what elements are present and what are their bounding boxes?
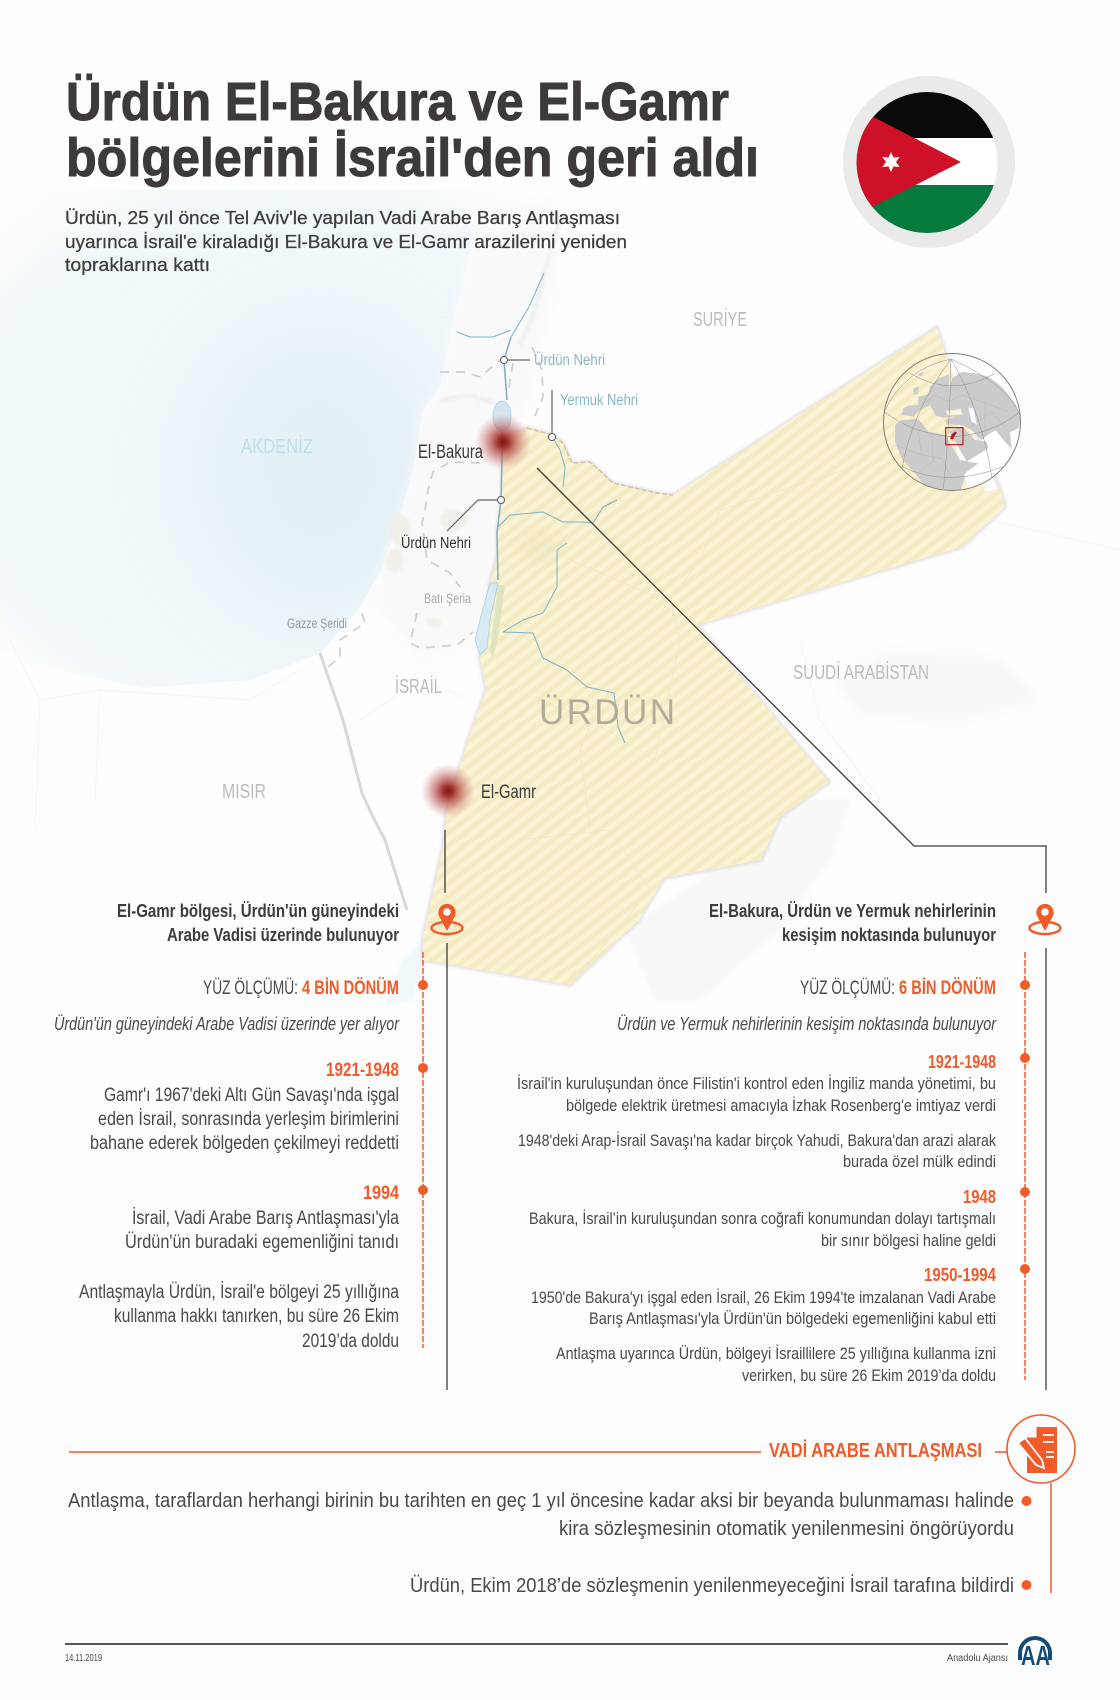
entry: 1948: bir sınır bölgesi haline geldi: [821, 1231, 996, 1250]
tan hill patch: [518, 527, 562, 563]
heading: VADİ ARABE ANTLAŞMASI: [769, 1439, 982, 1462]
callout: Ürdün Nehri north: Ürdün Nehri: [534, 351, 605, 369]
entry: agreement: 2019’da doldu: [302, 1331, 399, 1352]
entry: 1950-1994: Antlaşma uyarınca Ürdün, bölgeyi İsraillilere 25 yıllığına kullanma izni: [556, 1344, 996, 1363]
icon: location pin: [432, 904, 462, 934]
entry: 1921-1948: [90, 1060, 399, 1154]
panel: El-Gamr: [54, 900, 462, 1390]
date: 14.11.2019: [65, 1653, 102, 1664]
entry: 1921-1948: 1948'deki Arap-İsrail Savaşı'na kadar birçok Yahudi, Bakura'dan arazi alarak: [518, 1131, 996, 1150]
Sea of Galilee: [493, 401, 511, 431]
heading: El-Gamr bölgesi, Ürdün'ün güneyindeki: [117, 900, 399, 921]
entry: 1950-1994: verirken, bu süre 26 Ekim 2019’da doldu: [742, 1366, 996, 1385]
area: 6 BİN DÖNÜM: [899, 978, 996, 999]
label: Mısır: MISIR: [222, 781, 266, 803]
icon: Jordan flag: [843, 76, 1015, 248]
tributaries: [457, 330, 511, 337]
text: renewal clause: Antlaşma, taraflardan herhangi birinin bu tarihten en geç 1 yıl öncesine kadar aksi bir beyanda bulunmaması halinde: [68, 1490, 1014, 1512]
text: renewal clause: [68, 1490, 1032, 1540]
entry: 1950-1994: [531, 1265, 996, 1385]
entry: 1948: 1948: [963, 1187, 996, 1207]
label: Gazze Şeridi: Gazze Şeridi: [287, 615, 347, 631]
Jordan bank strip: [490, 585, 505, 657]
text: notification: Ürdün, Ekim 2018’de sözleşmenin yenilenmeyeceğini İsrail tarafına bildirdi: [410, 1574, 1014, 1597]
entry: 1921-1948: burada özel mülk edindi: [843, 1152, 996, 1171]
source: Anadolu Ajansı: [947, 1653, 1008, 1664]
hot spot: El-Bakura: [475, 414, 531, 470]
globe land: Arabia: [949, 427, 988, 462]
italic note: Ürdün ve Yermuk nehirlerinin kesişim noktasında bulunuyor: [617, 1014, 997, 1034]
entry: 1921-1948: Gamr'ı 1967'deki Altı Gün Savaşı'nda işgal: [104, 1085, 399, 1106]
entry: 1948: [529, 1187, 996, 1250]
title: [66, 72, 759, 188]
entry: 1994: [125, 1183, 399, 1253]
red locator box: [946, 428, 963, 445]
label: Ürdün country: ÜRDÜN: [539, 693, 675, 732]
sea: Mediterranean: [0, 190, 471, 688]
icon: location pin: [1030, 904, 1060, 934]
globe sea on the white side: [955, 445, 996, 488]
entry: 1921-1948: eden İsrail, sonrasında yerleşim birimlerini: [98, 1109, 399, 1130]
map: [0, 170, 1120, 1005]
callout: Yermuk Nehri: [548, 390, 638, 440]
panel: Vadi Arabe Antlaşması: [68, 1415, 1075, 1597]
entry: agreement: Antlaşmayla Ürdün, İsrail'e bölgeyi 25 yıllığına: [79, 1282, 399, 1303]
Jordan territory: [423, 327, 1005, 985]
entry: 1948: Bakura, İsrail’in kuruluşundan sonra coğrafi konumundan dolayı tartışmalı: [529, 1209, 996, 1228]
hill patches: [386, 510, 468, 627]
connector: El-Gamr to left panel: [444, 830, 446, 893]
Jordan river: [511, 273, 544, 337]
entry: 1921-1948: 1921-1948: [928, 1052, 996, 1072]
entry: 1950-1994: 1950'de Bakura'yı işgal eden İsrail, 26 Ekim 1994'te imzalanan Vadi Arabe: [531, 1288, 996, 1307]
area: [203, 978, 399, 999]
area: [800, 978, 996, 999]
entry: 1921-1948: bahane ederek bölgeden çekilmeyi reddetti: [90, 1133, 399, 1154]
entry: 1921-1948: 1921-1948: [326, 1060, 399, 1081]
heading: Arabe Vadisi üzerinde bulunuyor: [167, 924, 399, 945]
icon: Anadolu Agency logo: AA: [1021, 1640, 1050, 1671]
land relief: Israel, West Bank and Lebanon: [372, 200, 560, 660]
label: El-Bakura: El-Bakura: [418, 442, 483, 463]
globe graticule: [884, 359, 1020, 488]
Jordan border shadow: [423, 327, 1005, 985]
Gulf of Aqaba: [385, 937, 423, 1005]
entry: 1994: İsrail, Vadi Arabe Barış Antlaşması'yla: [132, 1208, 399, 1229]
heading rule: [69, 1451, 1007, 1453]
heading: [709, 900, 996, 945]
faint roads in Jordan: [520, 465, 860, 985]
entry: agreement: kullanma hakkı tanırken, bu süre 26 Ekim: [114, 1306, 399, 1327]
heading: El-Bakura, Ürdün ve Yermuk nehirlerinin: [709, 900, 996, 921]
vertical line: [446, 943, 448, 1390]
entry: agreement: [79, 1282, 399, 1352]
globe inland seas: [968, 408, 977, 425]
globe land: Eurasia: [902, 372, 1021, 449]
label: İsrail: İSRAİL: [395, 675, 442, 698]
callout: Ürdün Nehri south: [401, 496, 504, 552]
Egypt-Israel border: [320, 653, 407, 910]
entry: 1921-1948: [517, 1052, 996, 1171]
label: Suriye: SURİYE: [693, 308, 747, 331]
connector: El-Bakura to right panel: [537, 468, 1046, 893]
heading: [117, 900, 399, 945]
subtitle: Ürdün, 25 yıl önce Tel Aviv'le yapılan Vadi Arabe Barış Antlaşması: [65, 207, 620, 228]
Jordan north border tint: [527, 428, 673, 495]
label: Suudi Arabistan: SUUDİ ARABİSTAN: [793, 661, 929, 684]
callout: Ürdün Nehri north: [500, 351, 605, 369]
borders: Golan and West Bank dashed: [328, 347, 543, 667]
Jordan on globe: [950, 432, 957, 440]
entry: 1950-1994: Barış Antlaşması'yla Ürdün'ün bölgedeki egemenliğini kabul etti: [589, 1309, 996, 1328]
callout: Yermuk Nehri: Yermuk Nehri: [560, 392, 638, 409]
entry: 1921-1948: İsrail'in kuruluşundan önce Filistin'i kontrol eden İngiliz manda yönetimi, bu: [517, 1074, 996, 1093]
hot spot: El-Gamr: [421, 764, 475, 818]
title: Ürdün El-Bakura ve El-Gamr: [66, 72, 729, 132]
locator globe: [884, 354, 1022, 492]
italic note: Ürdün'ün güneyindeki Arabe Vadisi üzerinde yer alıyor: [54, 1014, 400, 1034]
subtitle: topraklarına kattı: [65, 254, 210, 275]
callout: Ürdün Nehri south: Ürdün Nehri: [401, 534, 471, 552]
soft desert patches: [625, 650, 1040, 1000]
label: Akdeniz: AKDENİZ: [241, 435, 313, 458]
area: 4 BİN DÖNÜM: [302, 978, 399, 999]
label: El-Gamr: El-Gamr: [481, 782, 537, 803]
entry: 1921-1948: bölgede elektrik üretmesi amacıyla İzhak Rosenberg'e imtiyaz verdi: [566, 1096, 996, 1115]
entry: 1950-1994: 1950-1994: [924, 1265, 996, 1285]
panel: El-Bakura: [517, 900, 1060, 1390]
faint roads on land: [10, 310, 1120, 830]
globe land: Africa: [895, 419, 978, 492]
icon: treaty document: [1007, 1415, 1075, 1483]
text: renewal clause: kira sözleşmesinin otomatik yenilenmesini öngörüyordu: [559, 1518, 1014, 1540]
heading: kesişim noktasında bulunuyor: [782, 924, 996, 945]
label: Batı Şeria: Batı Şeria: [424, 590, 471, 606]
subtitle: uyarınca İsrail'e kiraladığı El-Bakura ve El-Gamr arazilerini yeniden: [65, 231, 627, 252]
icon: Anadolu Agency logo: [1018, 1636, 1052, 1671]
entry: 1994: Ürdün'ün buradaki egemenliğini tanıdı: [125, 1232, 399, 1253]
timeline: [418, 952, 428, 1348]
area: YÜZ ÖLÇÜMÜ:: [203, 978, 298, 999]
footer: [65, 1636, 1052, 1671]
title: bölgelerini İsrail'den geri aldı: [66, 128, 759, 188]
globe land: Greenland and Britain: [910, 362, 942, 377]
vertical rule: [1050, 1483, 1052, 1593]
northern relief: [440, 220, 560, 405]
Dead Sea: [475, 583, 498, 655]
timeline: [1020, 952, 1030, 1380]
entry: 1994: 1994: [363, 1183, 399, 1204]
area: YÜZ ÖLÇÜMÜ:: [800, 978, 895, 999]
vertical line: [1045, 948, 1047, 1390]
rivers: [457, 273, 625, 743]
subtitle: [65, 207, 627, 275]
country borders: [895, 395, 1008, 478]
